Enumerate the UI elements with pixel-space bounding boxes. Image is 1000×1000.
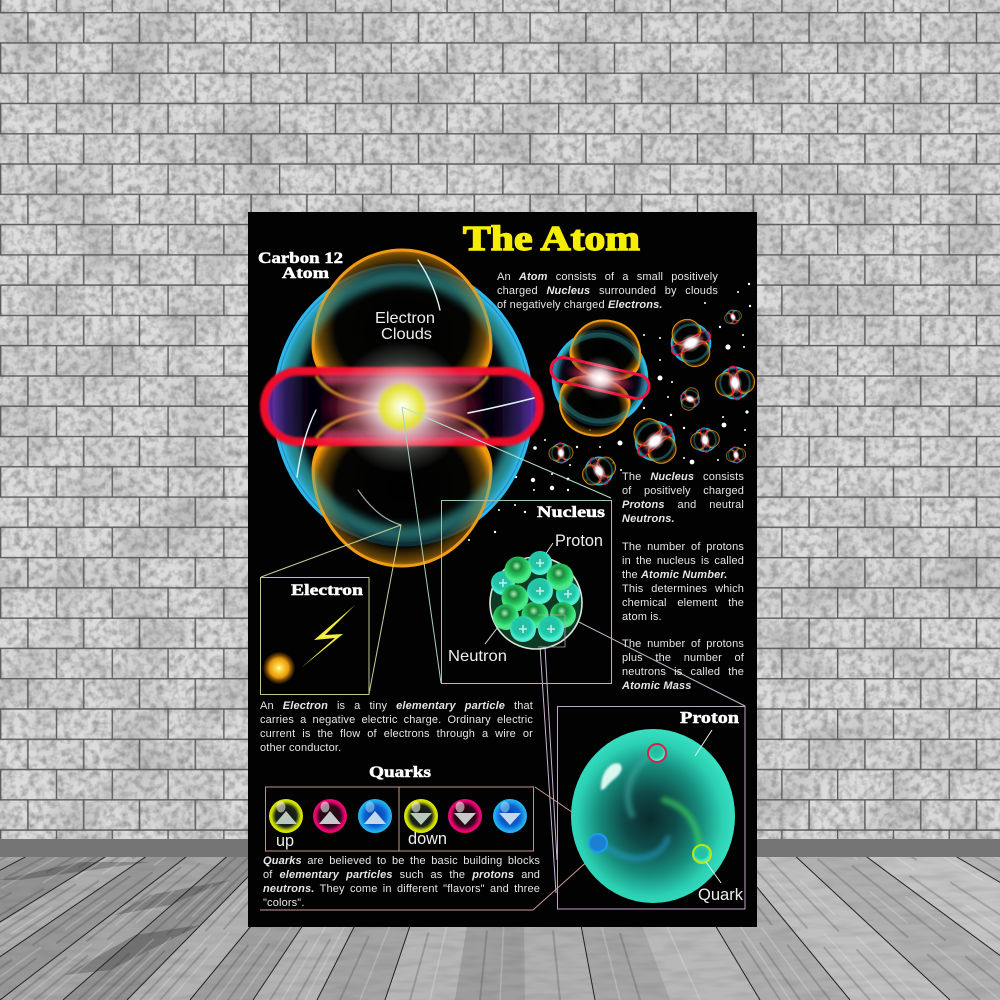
electron heading: Electron [291, 582, 363, 599]
panel: quark flavors [266, 787, 534, 851]
leader lines [695, 730, 721, 883]
tiny atom top [722, 307, 744, 327]
proton heading: Proton [680, 708, 739, 727]
quark: green [693, 845, 711, 863]
tiny atom far right [725, 445, 747, 465]
small atom lower right [689, 425, 721, 455]
label: Electron Clouds: Clouds [381, 326, 432, 343]
small atom top right [662, 312, 720, 374]
quark label: Quark [698, 885, 743, 904]
text: quarks description: Quarks are believed to be the basic building blocks [263, 855, 540, 867]
text: atomic mass: neutrons is called the [622, 666, 744, 678]
quark: blue [589, 834, 607, 852]
heading: Carbon 12 Atom: Atom [282, 265, 329, 282]
small atom right [713, 363, 757, 403]
text: quarks description: "colors". [263, 897, 305, 909]
panel: quarks heading: Quarks [369, 764, 431, 781]
electron streak lines [297, 260, 534, 525]
text: atom intro: charged Nucleus surrounded by clouds [497, 285, 718, 297]
text: atom intro: An Atom consists of a small positively [497, 271, 718, 283]
large mid-size atom [538, 310, 662, 446]
orange cusps between lobes and centre [316, 376, 488, 438]
text: atomic number: atom is. [622, 611, 662, 623]
label: down: down [408, 829, 447, 848]
panel: nucleus [442, 500, 612, 684]
text: atomic number: the Atomic Number. [622, 569, 727, 581]
text: atom intro [497, 271, 718, 311]
connector lines from atom to detail boxes [260, 407, 745, 910]
small atom bottom [576, 449, 622, 493]
pink central haze [317, 371, 487, 443]
text: nucleus description: Neutrons. [622, 513, 675, 525]
proton sphere [571, 729, 735, 903]
star dots [468, 283, 751, 541]
sphere highlight [601, 763, 622, 790]
label: up: up [276, 831, 294, 850]
icon: lightning bolt [301, 605, 355, 668]
text: nucleus description [622, 471, 744, 525]
lower orange electron cloud [313, 410, 491, 566]
heading: Carbon 12 Atom: Carbon 12 [258, 250, 343, 267]
quark: red [648, 744, 666, 762]
down quarks [404, 799, 527, 833]
red orbital band [264, 371, 540, 442]
text: atomic number: in the nucleus is called [622, 555, 744, 567]
text: atomic number [622, 541, 744, 623]
nucleus sphere [490, 551, 582, 649]
baseboard [0, 839, 1000, 857]
text: atomic number: The number of protons [622, 541, 744, 553]
proton label: Proton [555, 532, 603, 550]
title: The Atom [463, 219, 640, 258]
poster background [248, 212, 757, 927]
nucleus heading: Nucleus [537, 504, 605, 521]
text: atomic number: This determines which [622, 583, 744, 595]
panel: proton [558, 706, 745, 909]
text: atom intro: of negatively charged Electrons. [497, 299, 663, 311]
yellow nucleus [377, 382, 427, 432]
text: quarks description: neutrons. They come in different "flavors" and three [263, 883, 540, 895]
main Carbon 12 atom [264, 250, 540, 566]
upper orange electron cloud [313, 250, 491, 407]
text: atomic mass [622, 638, 744, 692]
teal inner shell glow across clouds [287, 277, 519, 533]
text: electron description: other conductor. [260, 742, 341, 754]
small proton marker box [538, 615, 565, 647]
text: nucleus description: Protons and neutral [622, 499, 744, 511]
tiny atom centre right [677, 385, 703, 413]
text: atomic number: chemical element the [622, 597, 744, 609]
panel: electron [260, 578, 369, 694]
label: Electron Clouds [375, 310, 435, 343]
quark swirl tails [606, 754, 700, 858]
neutron label: Neutron [448, 648, 507, 665]
white central glow [336, 341, 468, 473]
tiny atom left [548, 441, 574, 465]
label: Electron Clouds: Electron [375, 310, 435, 327]
blue outer shell [274, 265, 532, 545]
proton leader [543, 543, 553, 558]
up quarks [269, 799, 392, 833]
small atom lower [623, 409, 687, 473]
text: nucleus description: The Nucleus consists [622, 471, 744, 483]
text: electron description [260, 700, 533, 754]
text: electron description: current is the flow of electrons through a wire or [260, 728, 533, 740]
text: electron description: carries a negative electric charge. Ordinary electric [260, 714, 533, 726]
text: atomic mass: Atomic Mass [622, 680, 692, 692]
text: quarks description [263, 855, 540, 909]
wood floor [0, 857, 1000, 1000]
text: atomic mass: The number of protons [622, 638, 744, 650]
icon: electron ball [263, 652, 295, 684]
text: nucleus description: of positively charged [622, 485, 744, 497]
neutron leader [485, 627, 498, 644]
text: quarks description: of elementary particles such as the protons and [263, 869, 540, 881]
text: atomic mass: plus the number of [622, 652, 744, 664]
text: electron description: An Electron is a tiny elementary particle that [260, 700, 533, 712]
heading: Carbon 12 Atom [258, 250, 343, 282]
